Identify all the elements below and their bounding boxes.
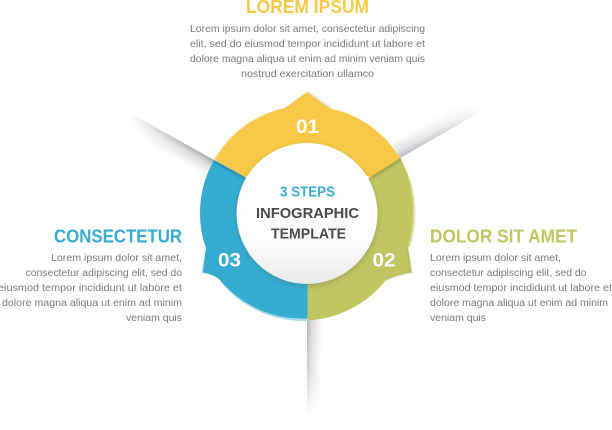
number 01: 01 (296, 117, 319, 138)
center text (256, 184, 359, 242)
text block: right: dolore magna aliqua ut enim ad minim (430, 297, 608, 309)
text block: top: Lorem ipsum dolor sit amet, consectetur adipiscing (190, 23, 425, 35)
shadow ray: bottom (307, 320, 320, 409)
text block: top: nostrud exercitation ullamco (241, 68, 374, 80)
text block: left: veniam quis (126, 312, 182, 324)
text block: right: veniam quis (430, 312, 486, 324)
center text: 3 STEPS (280, 184, 335, 200)
heading: Consectetur: CONSECTETUR (54, 226, 182, 246)
text block: left: Lorem ipsum dolor sit amet, (51, 252, 182, 264)
segment 02: green (308, 158, 416, 320)
shadow ray: upper right (393, 114, 475, 158)
center disc shadow (236, 145, 378, 286)
text block: right (430, 252, 612, 324)
text block: left: consectetur adipiscing elit, sed do (26, 267, 182, 279)
text block: top: elit, sed do eiusmod tempor incididunt ut labore et (190, 38, 425, 50)
center disc (236, 143, 378, 284)
text block: top: dolore magna aliqua ut enim ad minim veniam quis (190, 53, 425, 65)
text block: right: eiusmod tempor incididunt ut labore et (430, 282, 612, 294)
heading: Dolor Sit Amet: DOLOR SIT AMET (430, 226, 578, 246)
text block: left: eiusmod tempor incididunt ut labore et (0, 282, 182, 294)
text block: left: dolore magna aliqua ut enim ad minim (2, 297, 182, 309)
text block: left (0, 252, 182, 324)
text block: top (190, 23, 425, 80)
text block: right: consectetur adipiscing elit, sed do (430, 267, 587, 279)
number 02: 02 (372, 250, 396, 272)
number 03: 03 (218, 250, 241, 272)
segment 01: yellow (214, 92, 400, 177)
segment 03: blue (200, 160, 308, 321)
shadow ray: upper left (136, 117, 214, 174)
text block: right: Lorem ipsum dolor sit amet, (430, 252, 561, 264)
center text: TEMPLATE (271, 226, 346, 242)
center text: INFOGRAPHIC (256, 205, 359, 222)
